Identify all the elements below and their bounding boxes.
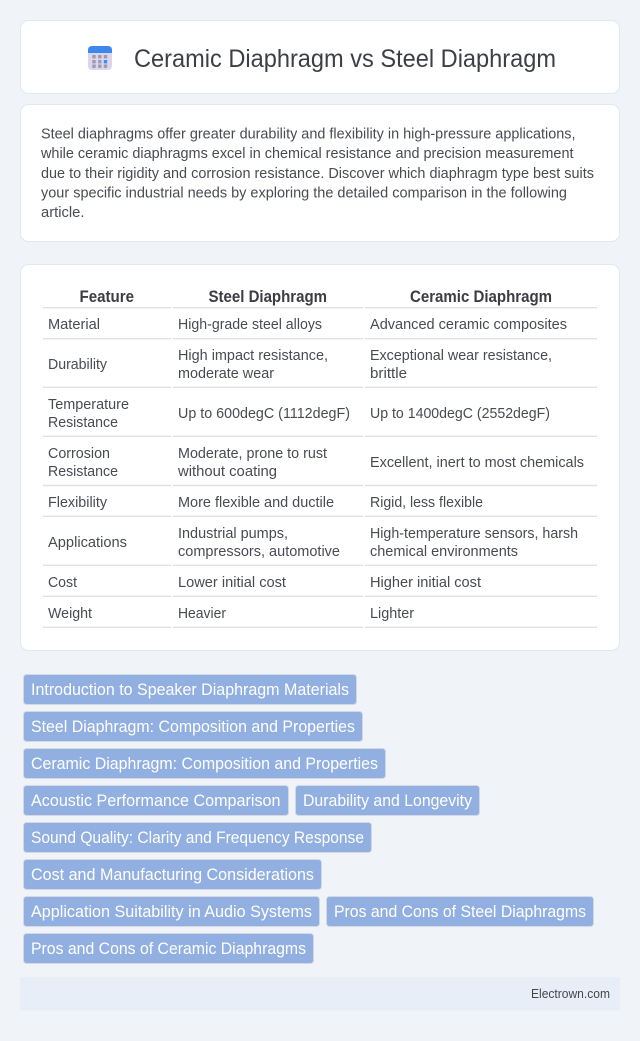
tag: durability: Durability and Longevity [303,791,473,810]
row: cost: Cost [48,575,77,591]
row: corrosion resistance: Moderate, prone to rust [178,446,327,462]
row: durability: Exceptional wear resistance, [370,348,552,364]
row: cost [48,575,481,591]
panel: introduction [20,104,620,242]
tag: acoustic performance [24,786,288,816]
text block: introduction: due to their rigidity and corrosion resistance. Discover which diaphragm type best suits [41,166,594,182]
tag: pros and cons steel [326,896,594,926]
table header: Ceramic Diaphragm [410,288,552,306]
row: material [48,317,567,333]
row: applications: Industrial pumps, [178,526,288,542]
row: corrosion resistance: Excellent, inert to most chemicals [370,455,584,471]
text block: introduction [40,127,594,221]
row: material: High-grade steel alloys [178,317,322,333]
row: temperature resistance: Resistance [48,415,118,431]
topic tags [24,674,594,964]
text block: introduction: your specific industrial needs by exploring the detailed comparison in the following [41,185,567,201]
row: temperature resistance: Up to 1400degC (2552degF) [370,406,550,422]
tag: ceramic composition [24,748,386,778]
tag: pros and cons steel: Pros and Cons of Steel Diaphragms [334,902,586,921]
row: durability: High impact resistance, [178,348,328,364]
footer [20,977,620,1010]
row: weight: Lighter [370,606,414,622]
row: flexibility: More flexible and ductile [178,495,334,511]
panel: comparison table [20,264,620,650]
row: applications [48,526,578,560]
tag: pros and cons ceramic [24,934,314,964]
text block: introduction: Steel diaphragms offer greater durability and flexibility in high-pressure applications, [41,127,576,143]
row: weight: Heavier [178,606,226,622]
row: material: Advanced ceramic composites [370,317,567,333]
row: durability: moderate wear [178,366,274,382]
table header: Steel Diaphragm [208,288,327,306]
row: durability [48,348,552,382]
row: material: Material [48,317,100,333]
panel: header [20,20,620,94]
table header [80,288,552,306]
tag: application suitability: Application Suitability in Audio Systems [31,902,312,921]
row: durability: Durability [48,357,108,373]
tag: sound quality: Sound Quality: Clarity and Frequency Response [31,828,364,847]
tag: acoustic performance: Acoustic Performance Comparison [31,791,280,810]
row: flexibility [48,495,483,511]
row: corrosion resistance: without coating [177,464,277,480]
table header: Feature [80,288,134,306]
footer credit: Electrown.com [531,987,610,1001]
row: weight: Weight [48,606,92,622]
row: cost: Lower initial cost [178,575,286,591]
row: applications: High-temperature sensors, harsh [370,526,578,542]
row: corrosion resistance: Corrosion [48,446,110,462]
text block: introduction: while ceramic diaphragms excel in chemical resistance and precision measurement [40,146,574,162]
tag: introduction: Introduction to Speaker Diaphragm Materials [31,680,349,699]
row: temperature resistance: Up to 600degC (1112degF) [178,406,350,422]
tag: steel composition [24,712,362,742]
tag: sound quality [24,822,372,852]
row: temperature resistance [48,397,550,431]
row: flexibility: Rigid, less flexible [370,495,483,511]
row: cost: Higher initial cost [370,575,481,591]
row: applications: Applications [48,535,127,551]
tag: application suitability [24,896,320,926]
row: applications: chemical environments [370,544,518,560]
title: Ceramic Diaphragm vs Steel Diaphragm [134,45,556,73]
tag: introduction [24,674,356,704]
tag: pros and cons ceramic: Pros and Cons of Ceramic Diaphragms [31,939,306,958]
tag: steel composition: Steel Diaphragm: Composition and Properties [31,717,355,736]
row: weight [48,606,414,622]
text block: introduction: article. [41,205,84,221]
tag: cost [24,860,322,890]
row: durability: brittle [370,366,407,382]
tag: durability [296,786,480,816]
tag: ceramic composition: Ceramic Diaphragm: Composition and Properties [31,754,378,773]
row: flexibility: Flexibility [48,495,108,511]
row: corrosion resistance: Resistance [48,464,118,480]
tag: cost: Cost and Manufacturing Considerations [31,865,314,884]
row: corrosion resistance [48,446,584,480]
row: temperature resistance: Temperature [48,397,129,413]
icon: calendar [88,46,112,70]
row: applications: compressors, automotive [178,544,340,560]
